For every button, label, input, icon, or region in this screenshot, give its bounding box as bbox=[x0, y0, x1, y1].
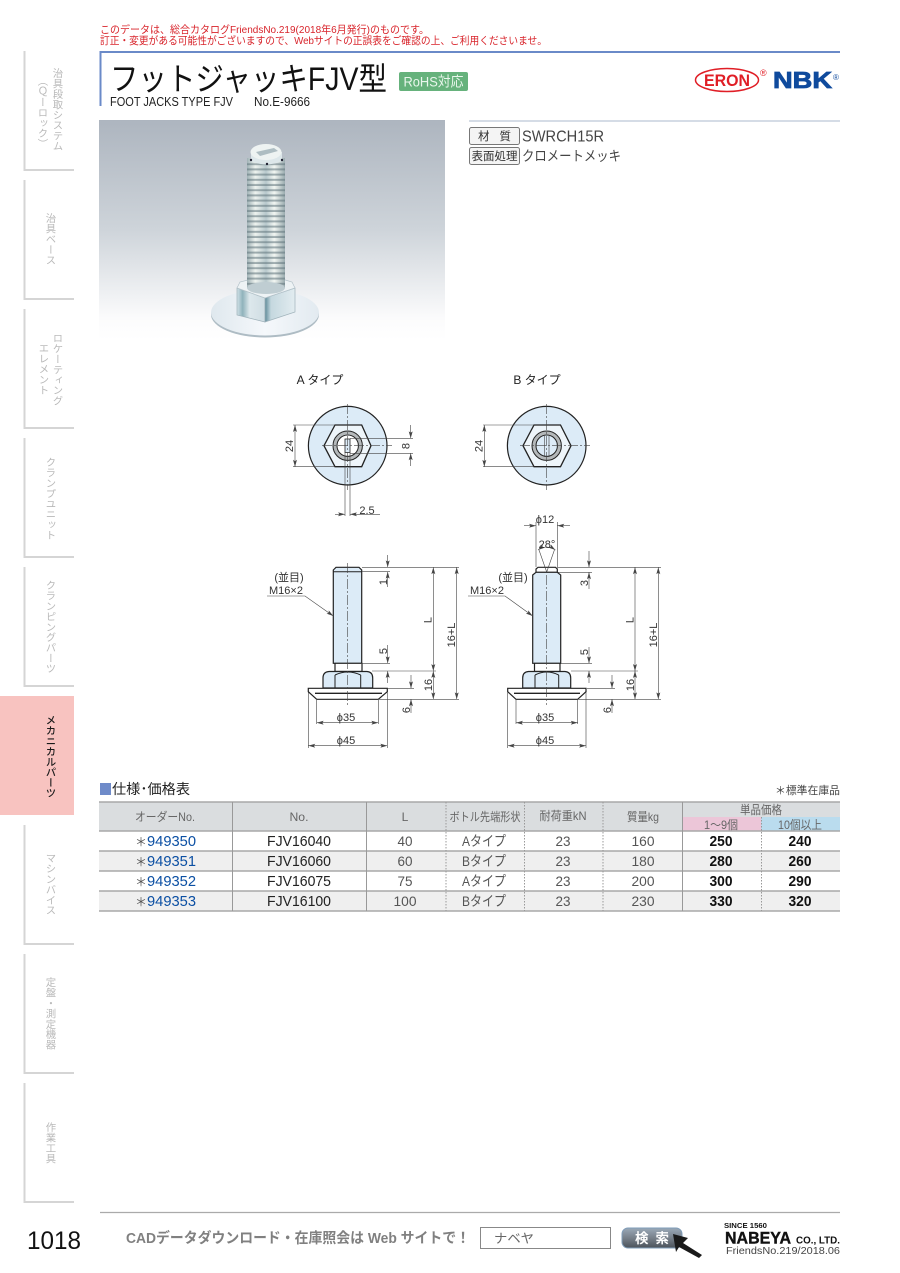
notice text: このデータは、総合カタログFriendsNo.219(2018年6月発行)のものです。 bbox=[100, 23, 429, 36]
row 949353 bbox=[135, 893, 812, 910]
row 949351: ＊ bbox=[135, 855, 147, 869]
row 949352: 300 bbox=[710, 874, 732, 890]
side view bbox=[468, 514, 661, 748]
logo: ERON: ® bbox=[760, 68, 767, 78]
sidebar: chapter tabs bbox=[0, 51, 74, 1202]
row 949353: Bタイプ bbox=[462, 893, 506, 909]
side view: 5 bbox=[579, 649, 591, 655]
search button: 検索 bbox=[635, 1230, 669, 1246]
title: フットジャッキFJV型 bbox=[110, 61, 387, 97]
tab: クランプユニット: クランプユニット bbox=[44, 457, 56, 540]
tab: 治具段取システム: （Ｑーロック） bbox=[36, 76, 48, 149]
side view: 16+L bbox=[648, 623, 660, 647]
side view: L bbox=[624, 617, 636, 623]
row 949351: Bタイプ bbox=[462, 853, 506, 869]
tab: メカニカルパーツ (active) bbox=[0, 696, 74, 815]
side view: 6 bbox=[401, 707, 413, 713]
side view: 3 bbox=[579, 580, 591, 586]
row 949352: ＊ bbox=[135, 875, 147, 889]
top view: 8 bbox=[400, 443, 412, 449]
row 949350: 250 bbox=[710, 834, 732, 850]
company mark: FriendsNo.219/2018.06 bbox=[726, 1245, 840, 1257]
row 949351: 949351 bbox=[147, 853, 196, 870]
side view: 6 bbox=[602, 707, 614, 713]
section heading: spec table: 仕様･価格表 bbox=[112, 781, 190, 797]
table header: 耐荷重kN bbox=[540, 809, 586, 823]
tab: ロケーティングエレメント: エレメント bbox=[36, 343, 48, 395]
row 949351: 260 bbox=[788, 854, 812, 870]
row 949353: 23 bbox=[556, 893, 571, 909]
subtitle bbox=[110, 95, 310, 109]
top view bbox=[474, 404, 590, 490]
threaded shaft bbox=[247, 158, 285, 288]
search button bbox=[622, 1228, 682, 1248]
table header: No. bbox=[290, 810, 308, 824]
stock note: ＊標準在庫品 bbox=[775, 783, 840, 797]
logo: NBK: ® bbox=[833, 73, 839, 82]
tab: 作業工具 bbox=[24, 1083, 74, 1202]
row 949352 bbox=[135, 873, 812, 890]
row 949351: FJV16060 bbox=[267, 853, 331, 870]
side view: 28° bbox=[539, 539, 555, 551]
slotted head bbox=[251, 152, 282, 164]
table header: L bbox=[402, 810, 409, 824]
tab: 定盤・測定機器: 定盤・測定機器 bbox=[44, 977, 56, 1051]
side view bbox=[267, 555, 459, 748]
logo: ERON: ERON bbox=[704, 72, 750, 90]
logo: ERON bbox=[696, 68, 767, 92]
row 949353: ＊ bbox=[135, 895, 147, 909]
tab: クランピングパーツ bbox=[24, 567, 74, 686]
RoHS badge: RoHS対応 bbox=[404, 74, 464, 90]
surface treatment: 表面処理 bbox=[472, 149, 518, 163]
row 949350 bbox=[135, 833, 812, 850]
surface treatment: クロメートメッキ bbox=[522, 148, 621, 164]
notice text: 訂正・変更がある可能性がございますので、Webサイトの正誤表をご確認の上、ご利用くださいませ。 bbox=[100, 34, 547, 47]
material: 材 質 bbox=[478, 129, 511, 143]
company mark: CO., LTD. bbox=[796, 1234, 840, 1246]
product photo bbox=[99, 120, 445, 340]
notice text bbox=[100, 23, 547, 47]
tab: マシンバイス bbox=[24, 825, 74, 944]
top view: 2.5 bbox=[359, 505, 375, 517]
row 949353: 330 bbox=[710, 894, 732, 910]
label: B タイプ bbox=[513, 373, 561, 387]
hex nut bbox=[237, 288, 265, 322]
tab: ロケーティングエレメント bbox=[24, 309, 74, 428]
web prompt: CADデータダウンロード・在庫照会は Web サイトで！ bbox=[126, 1229, 470, 1247]
table header: 10個以上 bbox=[778, 818, 822, 832]
table header: 1～9個 bbox=[704, 818, 738, 832]
row 949350: 240 bbox=[788, 834, 812, 850]
subtitle: FOOT JACKS TYPE FJV bbox=[110, 95, 234, 109]
row 949350: ＊ bbox=[135, 835, 147, 849]
side view: ϕ45 bbox=[536, 735, 554, 747]
table header: 質量kg bbox=[627, 809, 659, 824]
row 949351: 180 bbox=[632, 853, 655, 869]
side view: L bbox=[422, 617, 434, 623]
row 949351: 23 bbox=[556, 853, 571, 869]
side view: 16 bbox=[625, 679, 637, 691]
tab: マシンバイス: マシンバイス bbox=[44, 853, 56, 915]
row 949352: Aタイプ bbox=[462, 873, 506, 889]
row 949352: 200 bbox=[632, 873, 655, 889]
row 949353: 230 bbox=[632, 893, 655, 909]
top view: 24 bbox=[474, 440, 486, 452]
material: SWRCH15R bbox=[522, 128, 604, 146]
logo: NBK: NBK bbox=[773, 67, 832, 93]
company mark bbox=[724, 1221, 840, 1257]
surface treatment bbox=[470, 148, 621, 164]
tab: 定盤・測定機器 bbox=[24, 954, 74, 1073]
search box bbox=[480, 1228, 610, 1248]
side view: ϕ45 bbox=[337, 735, 355, 747]
side view: 5 bbox=[378, 648, 390, 654]
drawing: A type bbox=[267, 373, 459, 748]
top view bbox=[284, 404, 413, 517]
row 949353: 320 bbox=[788, 894, 812, 910]
row 949353: FJV16100 bbox=[267, 893, 331, 910]
tab: 作業工具: 作業工具 bbox=[44, 1122, 56, 1164]
row 949352: 949352 bbox=[147, 873, 196, 890]
side view: (並目) bbox=[498, 570, 528, 584]
subtitle: No.E-9666 bbox=[254, 95, 310, 109]
icon: cursor arrow bbox=[673, 1234, 702, 1258]
row 949350: 160 bbox=[632, 833, 655, 849]
side view: 16 bbox=[423, 679, 435, 691]
tab: 治具ベース bbox=[24, 180, 74, 299]
side view: (並目) bbox=[274, 570, 304, 584]
spec and price table bbox=[99, 802, 840, 911]
table header: 単品価格 bbox=[740, 802, 782, 817]
row 949352: 23 bbox=[556, 873, 571, 889]
company mark: SINCE 1560 bbox=[724, 1221, 767, 1230]
label: A タイプ bbox=[297, 373, 343, 387]
side view: M16×2 bbox=[470, 585, 504, 597]
side view: M16×2 bbox=[269, 585, 303, 597]
company mark: NABEYA bbox=[725, 1228, 791, 1248]
table header: オーダーNo. bbox=[135, 809, 195, 824]
row 949350: 949350 bbox=[147, 833, 196, 850]
tab: ロケーティングエレメント: ロケーティング bbox=[50, 333, 63, 406]
side view: 1 bbox=[378, 579, 390, 585]
tab: 治具段取システム bbox=[24, 51, 74, 170]
spec block bbox=[469, 121, 840, 164]
row 949351 bbox=[135, 853, 812, 870]
top view: 24 bbox=[284, 440, 296, 452]
row 949351: 280 bbox=[710, 854, 732, 870]
tab: 治具ベース: 治具ベース bbox=[44, 212, 56, 265]
row 949352: 75 bbox=[398, 873, 413, 889]
tab: クランピングパーツ: クランピングパーツ bbox=[44, 580, 56, 674]
footer bbox=[27, 1212, 840, 1258]
side view: ϕ35 bbox=[536, 712, 554, 724]
row 949350: 40 bbox=[398, 833, 413, 849]
row 949353: 949353 bbox=[147, 893, 196, 910]
row 949352: FJV16075 bbox=[267, 873, 331, 890]
drawing: B type bbox=[468, 373, 661, 748]
material bbox=[470, 128, 604, 146]
tab: メカニカルパーツ (active): メカニカルパーツ bbox=[44, 715, 56, 798]
row 949350: FJV16040 bbox=[267, 833, 331, 850]
row 949350: Aタイプ bbox=[462, 833, 506, 849]
header frame bbox=[100, 52, 840, 106]
row 949351: 60 bbox=[398, 853, 413, 869]
table header: ボトル先端形状 bbox=[450, 810, 520, 824]
row 949352: 290 bbox=[788, 874, 812, 890]
table header bbox=[135, 802, 822, 832]
flange bbox=[211, 292, 319, 338]
row 949353: 100 bbox=[394, 893, 417, 909]
side view: ϕ12 bbox=[536, 514, 554, 526]
search box: ナベヤ bbox=[494, 1231, 534, 1246]
side view: ϕ35 bbox=[337, 712, 355, 724]
side view: 16+L bbox=[446, 623, 458, 647]
page number: 1018 bbox=[27, 1227, 81, 1255]
tab: クランプユニット bbox=[24, 438, 74, 557]
row 949350: 23 bbox=[556, 833, 571, 849]
tab: 治具段取システム: 治具段取システム bbox=[50, 67, 63, 151]
